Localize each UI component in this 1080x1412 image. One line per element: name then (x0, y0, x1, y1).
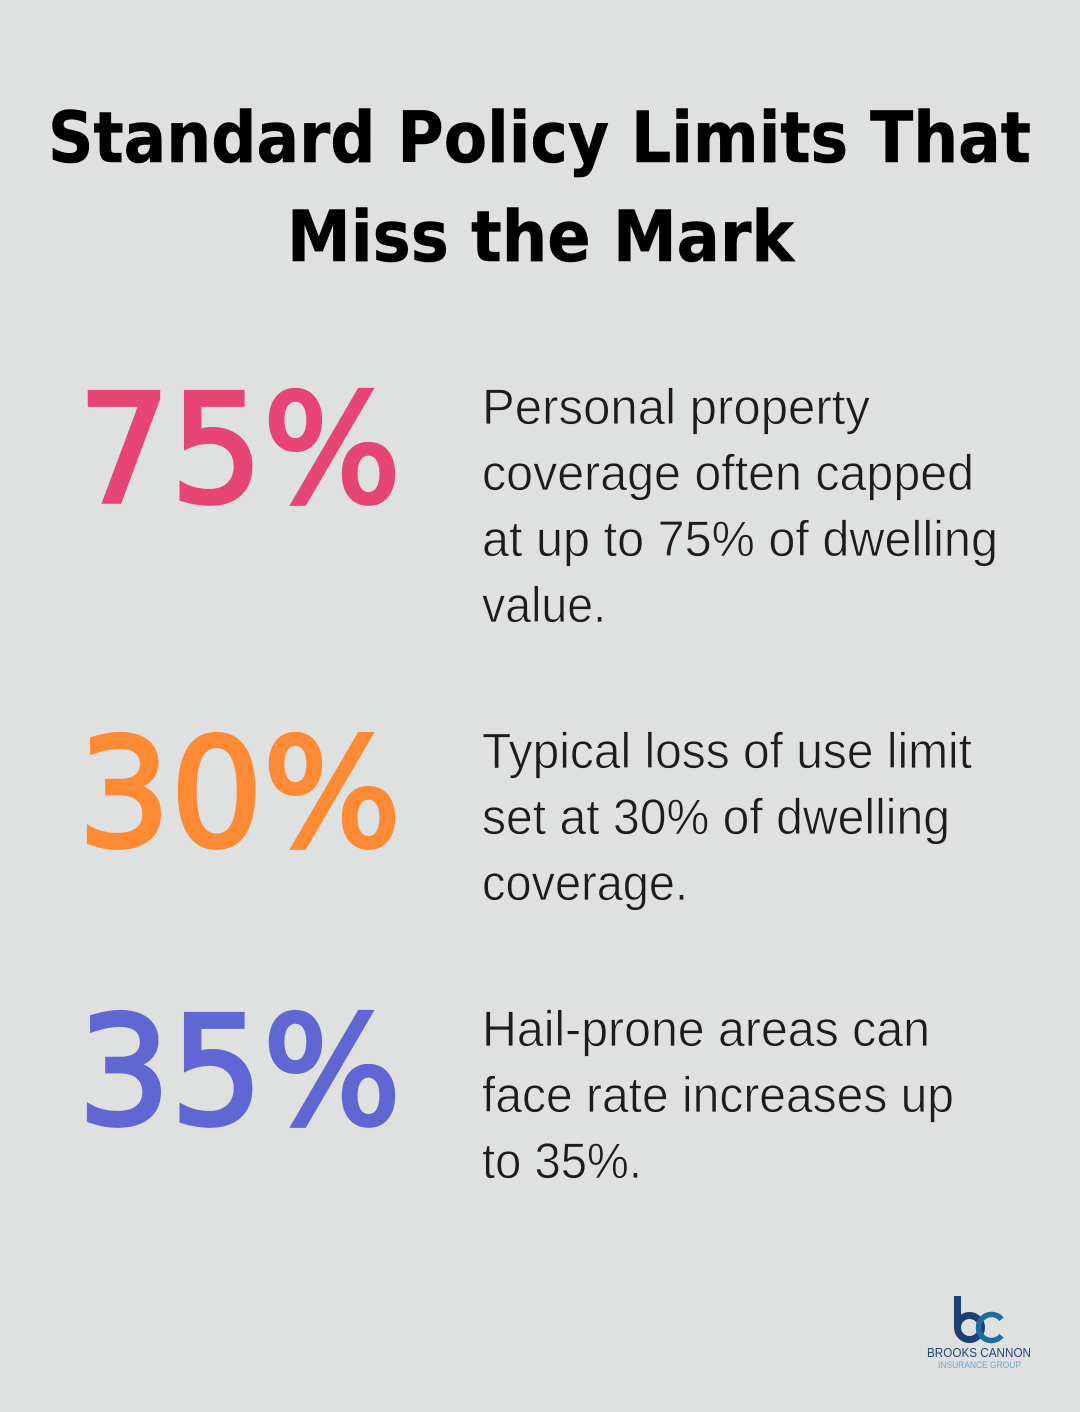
stat description: hail-prone areas (482, 1001, 954, 1189)
panel: 75% statistic (78, 364, 998, 633)
stat description: personal property (482, 379, 998, 633)
logo tagline: INSURANCE GROUP (938, 1360, 1021, 1371)
stat description: loss of use: set at 30% of dwelling (482, 789, 950, 845)
stat description: personal property: Personal property (482, 379, 870, 435)
stat description: loss of use (482, 723, 972, 911)
logo wordmark: BROOKS CANNON (927, 1346, 1031, 1360)
icon: bc monogram (958, 1296, 1002, 1341)
stat number: 75%: 75% (78, 364, 401, 538)
logo: Brooks Cannon Insurance Group (927, 1296, 1031, 1371)
title (48, 97, 1031, 278)
title: Miss the Mark (287, 196, 795, 278)
panel: 30% statistic (78, 708, 972, 911)
stat description: personal property: value. (482, 577, 606, 633)
stat description: personal property: at up to 75% of dwelling (482, 511, 998, 567)
panel: 35% statistic (78, 986, 954, 1189)
stat description: hail-prone areas: to 35%. (482, 1133, 642, 1189)
stat number: 35%: 35% (78, 986, 401, 1160)
stat description: personal property: coverage often capped (482, 445, 974, 501)
stat description: hail-prone areas: face rate increases up (482, 1067, 954, 1123)
stat number: 30%: 30% (78, 708, 401, 882)
stat description: loss of use: Typical loss of use limit (482, 723, 972, 779)
stat description: loss of use: coverage. (482, 855, 688, 911)
stat description: hail-prone areas: Hail-prone areas can (482, 1001, 930, 1057)
